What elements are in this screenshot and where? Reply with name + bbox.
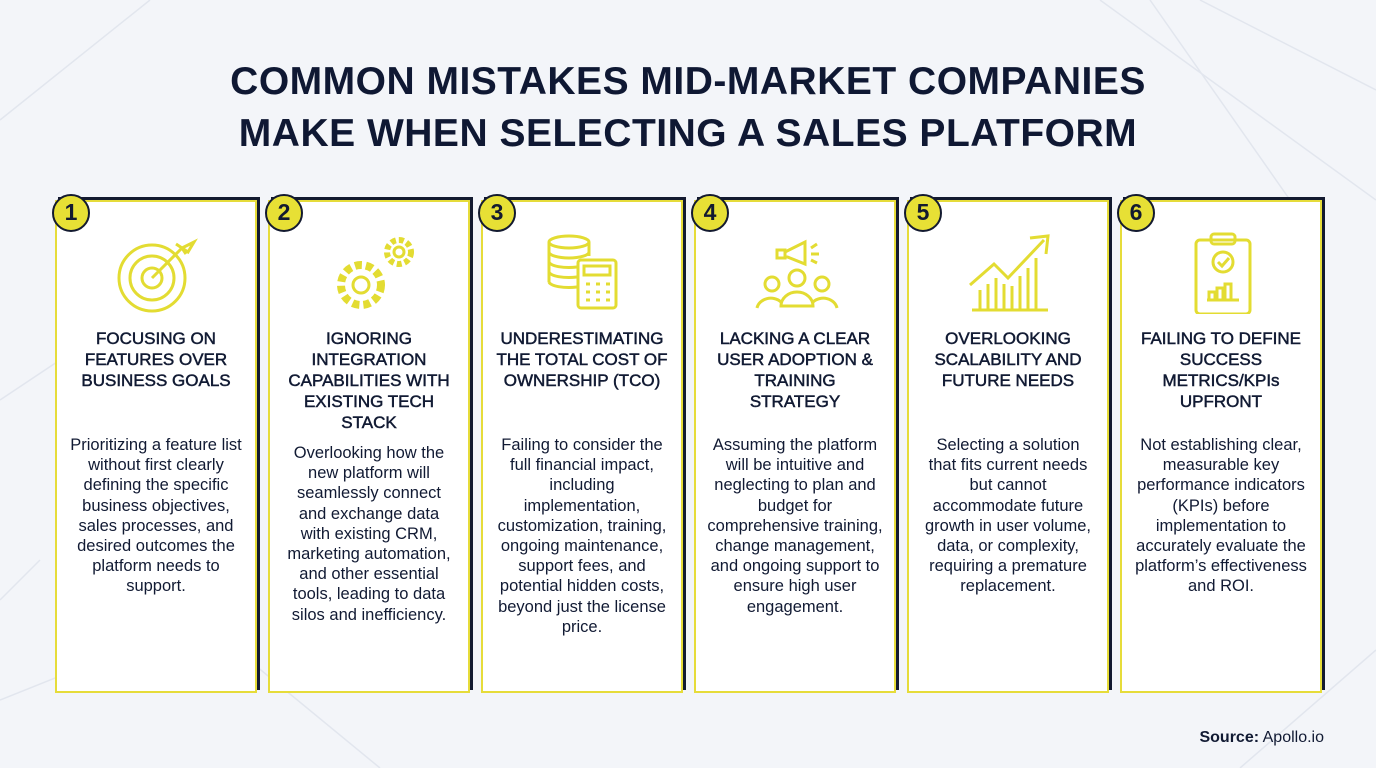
badge 4: 4 [704,199,716,225]
heading: SUCCESS [1180,350,1262,369]
heading: INTEGRATION [312,350,426,369]
heading: METRICS/KPIs [1162,371,1280,390]
heading: THE TOTAL COST OF [496,350,667,369]
body: Assuming the platform will be intuitive and neglecting to plan and budget for comprehensive training, change management, and ongoing support to ensure high user engagement. [707,436,883,616]
panel: 6 [1120,200,1322,693]
panel: 1 [55,200,257,693]
body: Not establishing clear, measurable key performance indicators (KPIs) before implementation to accurately evaluate the platform’s effectiveness and ROI. [1135,436,1307,595]
heading: FAILING TO DEFINE [1141,329,1301,348]
panel: 3 [481,200,683,693]
badge 6 [1117,194,1155,232]
heading: CAPABILITIES WITH [288,371,450,390]
heading: BUSINESS GOALS [81,371,231,390]
icon: clipboard [1194,232,1252,314]
badge 1: 1 [65,199,77,225]
badge 2 [265,194,303,232]
icon: gears [337,237,414,309]
badge 4 [691,194,729,232]
heading [934,329,1082,390]
heading: UPFRONT [1180,392,1262,411]
badge 5: 5 [917,199,929,225]
heading: SCALABILITY AND [934,350,1082,369]
heading: FEATURES OVER [85,350,227,369]
heading: FOCUSING ON [96,329,216,348]
heading: OWNERSHIP (TCO) [504,371,660,390]
heading: TRAINING [754,371,836,390]
body: Selecting a solution that fits current needs but cannot accommodate future growth in user volume, data, or complexity, requiring a premature replacement. [925,436,1091,595]
title: MAKE WHEN SELECTING A SALES PLATFORM [239,112,1137,155]
panel: 5 [907,200,1109,693]
badge 3: 3 [491,199,503,225]
badge 5 [904,194,942,232]
heading: USER ADOPTION & [717,350,873,369]
heading [717,329,873,411]
icon: coins and calculator [548,234,618,310]
badge 6: 6 [1130,199,1142,225]
heading: LACKING A CLEAR [720,329,870,348]
heading: STRATEGY [750,392,840,411]
heading: FUTURE NEEDS [942,371,1074,390]
title [230,60,1146,155]
badge 3 [478,194,516,232]
heading: UNDERESTIMATING [500,329,664,348]
heading: IGNORING [326,329,412,348]
heading [496,329,668,390]
heading: STACK [341,413,397,432]
icon: growth chart [969,234,1050,312]
badge 2: 2 [278,199,290,225]
heading [288,329,450,432]
heading [81,329,231,390]
icon: megaphone and people [756,240,838,308]
body: Prioritizing a feature list without first clearly defining the specific business objectives, sales processes, and desired outcomes the platform needs to support. [70,436,242,595]
heading [1141,329,1301,411]
panel: 4 [694,200,896,693]
body: Failing to consider the full financial impact, including implementation, customization, training, ongoing maintenance, support fees, and potential hidden costs, beyond just the license price. [498,436,666,636]
badge 1 [52,194,90,232]
heading: OVERLOOKING [945,329,1071,348]
icon: target [118,238,198,312]
panel: 2 [268,200,470,693]
body: Overlooking how the new platform will seamlessly connect and exchange data with existing CRM, marketing automation, and other essential tools, leading to data silos and inefficiency. [287,444,451,624]
heading: EXISTING TECH [304,392,434,411]
source: Source: Apollo.io [1199,729,1324,746]
title: COMMON MISTAKES MID-MARKET COMPANIES [230,60,1146,103]
